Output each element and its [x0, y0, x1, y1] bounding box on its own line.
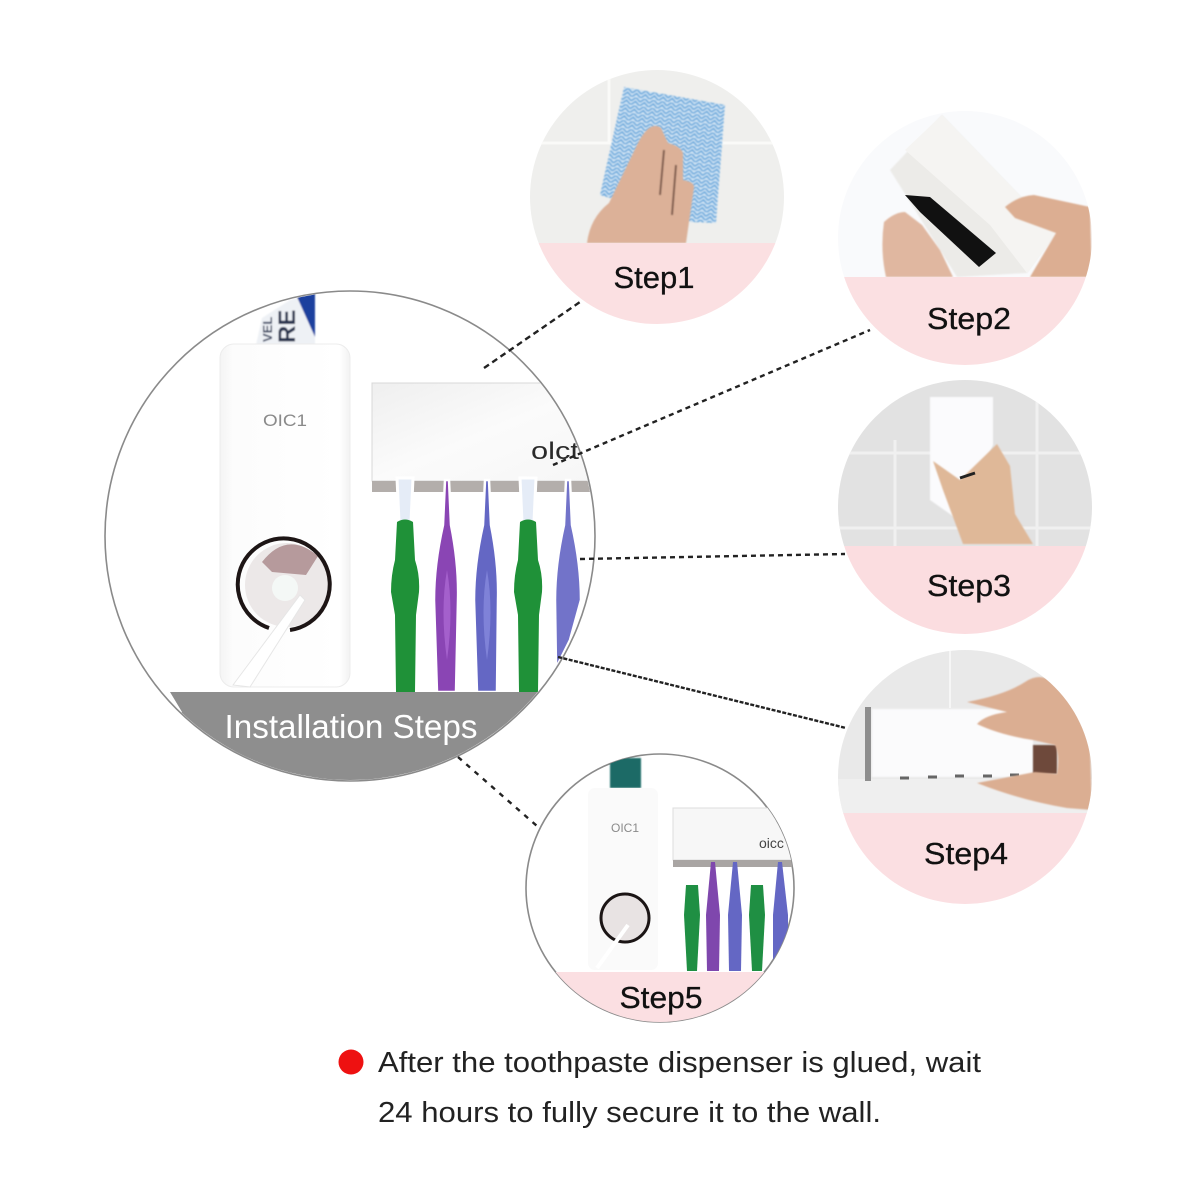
icon: toothpaste tube small: [610, 758, 641, 788]
icon: toothbrushes small: [684, 862, 788, 971]
panel: step 1: [530, 70, 785, 328]
panel: main installation circle: [100, 291, 602, 800]
dashed connector: step 5: [458, 757, 537, 826]
icon: toothbrush holder: olct: [531, 438, 579, 465]
icon: toothpaste dispenser: [220, 344, 350, 687]
icon: left hand: [882, 212, 953, 277]
icon: wiping hand: [587, 126, 694, 243]
icon: toothpaste dispenser: OIC1: [263, 411, 307, 430]
icon: dispenser on wall: [930, 397, 993, 521]
panel: step 4: Step4: [924, 836, 1008, 871]
gray footer band: [170, 692, 538, 780]
icon: toothbrush holder: [372, 383, 602, 492]
icon: right hand: [1005, 195, 1092, 277]
dashed connector: step 2: [553, 330, 870, 465]
dashed connector: step 1: [484, 302, 580, 368]
panel: step 5: [520, 754, 800, 1032]
icon: adhesive back of holder: [890, 152, 1026, 277]
icon: toothpaste tube: [256, 293, 315, 345]
icon: blue cloth: [600, 87, 725, 223]
icon: holder small: [673, 808, 798, 867]
icon: dispenser small: OIC1: [611, 821, 639, 835]
icon: holder being pressed: [865, 707, 1033, 781]
panel: step 3: [838, 380, 1093, 638]
icon: red bullet: [338, 1050, 364, 1074]
panel: step 3: Step3: [927, 568, 1011, 603]
icon: five toothbrushes: [391, 478, 581, 692]
icon: dark gap inside hand: [1033, 745, 1057, 774]
icon: holder small: oicc: [759, 835, 784, 851]
note text: After the toothpaste dispenser is glued, wait: [378, 1047, 981, 1079]
panel: step 1: Step1: [614, 260, 694, 295]
icon: toothpaste tube: VEL: [260, 317, 275, 342]
panel: step 2: Step2: [927, 301, 1011, 336]
icon: hand pressing dispenser: [933, 444, 1033, 544]
dashed connector: step 4: [558, 657, 846, 728]
dashed connector: step 3: [580, 554, 845, 559]
icon: dispenser small: [600, 788, 650, 944]
icon: black adhesive strip: [905, 195, 996, 267]
icon: toothpaste tube: RE: [274, 310, 301, 343]
panel: step 5: Step5: [620, 980, 702, 1015]
panel: step 4: [838, 650, 1093, 908]
panel: step 2: [838, 111, 1093, 367]
note text: 24 hours to fully secure it to the wall.: [378, 1097, 881, 1129]
icon: hand gripping holder: [967, 677, 1092, 810]
heading: installation steps: Installation Steps: [224, 708, 478, 745]
